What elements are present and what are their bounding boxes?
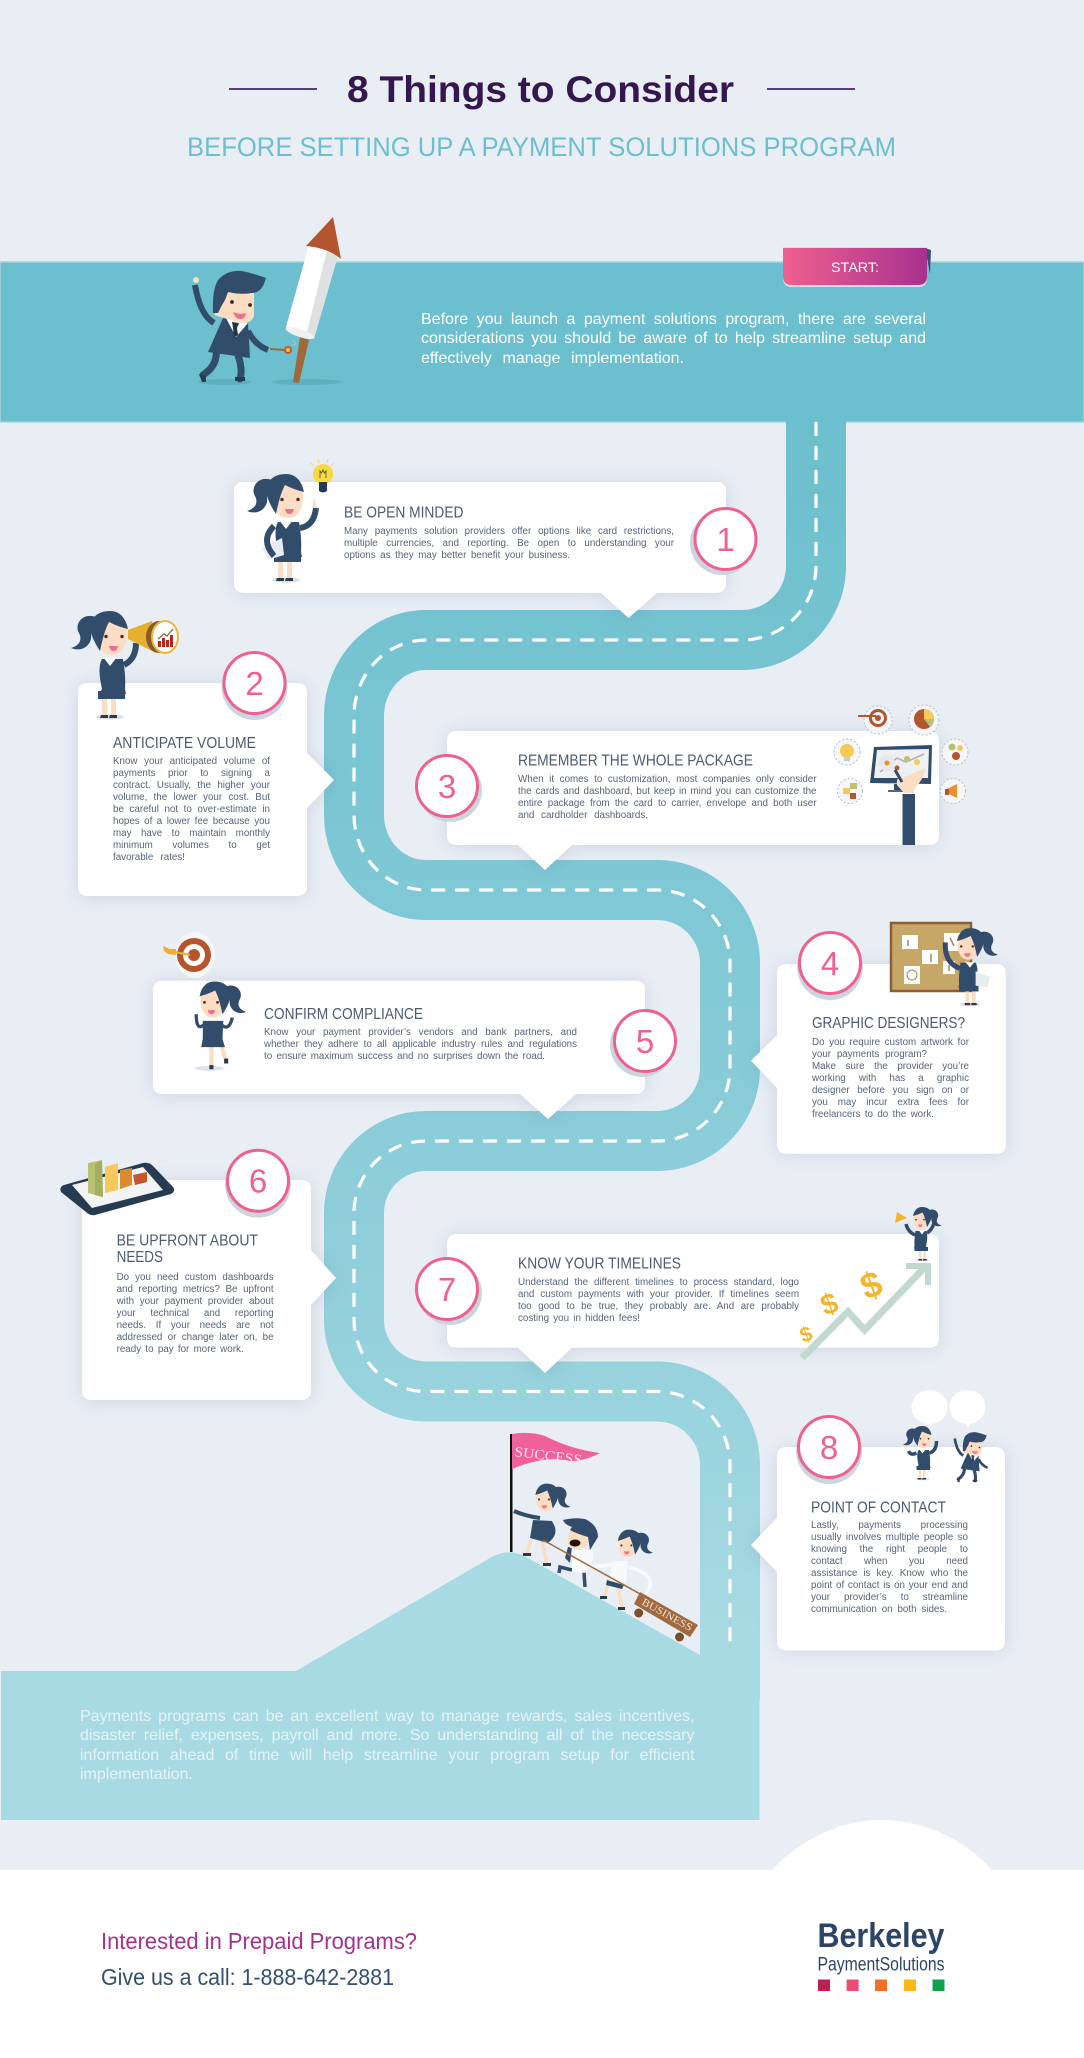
body 3: and cardholder dashboards. [518, 810, 648, 821]
body 5: whether they adhere to all applicable industry rules and regulations [264, 1039, 577, 1050]
body 6: your technical and reporting [117, 1308, 274, 1319]
closing text [80, 1707, 710, 1787]
success flag [510, 1433, 600, 1552]
title: 8 Things to Consider: 8 Things to Consider [347, 69, 734, 110]
body 7 [518, 1277, 809, 1327]
road centre dashes [354, 422, 816, 1643]
illustration: woman with light bulb [247, 459, 334, 582]
heading 3: REMEMBER THE WHOLE PACKAGE [518, 752, 753, 770]
heading 6: BE UPFRONT ABOUT [117, 1232, 258, 1250]
winding road [354, 418, 816, 1700]
body 2: volume, the lower your cost. But [113, 792, 270, 803]
heading 6 [117, 1232, 258, 1266]
closing text: disaster relief, expenses, payroll and more. So understanding all of the necessary [80, 1727, 694, 1744]
badge 2 [222, 652, 288, 720]
body 3: entire package from the card to carrier, envelope and both user [518, 798, 816, 809]
body 5: Know your payment provider’s vendors and bank partners, and [264, 1027, 577, 1038]
body 7: costing you in hidden fees! [518, 1313, 640, 1324]
body 7: Understand the different timelines to process standard, logo [518, 1277, 799, 1288]
body 6: addressed or change later on, be [117, 1332, 274, 1343]
heading 8: POINT OF CONTACT [811, 1500, 946, 1516]
badge 8 [796, 1416, 862, 1484]
body 7: too good to be true, they probably are. And are probably [518, 1301, 799, 1312]
body 2: be careful not to over-estimate in [113, 804, 270, 815]
body 3: When it comes to customization, most companies only consider [518, 774, 816, 785]
body 8: your provider’s to streamline [811, 1592, 968, 1603]
badge 8: 8 [820, 1429, 838, 1466]
body 1: options as they may better benefit your business. [344, 550, 570, 561]
step 1 card: be open minded [234, 459, 756, 618]
body 4: working with has a graphic [812, 1073, 969, 1084]
body 4: Make sure the provider you’re [812, 1061, 969, 1072]
Berkeley Payment Solutions logo [818, 1917, 945, 1991]
body 2: payments prior to signing a [113, 768, 270, 779]
body 4: Do you require custom artwork for [812, 1037, 969, 1048]
start banner band [0, 262, 1084, 422]
badge 5 [610, 1010, 676, 1077]
body 6: ready to pay for more work. [117, 1344, 244, 1355]
step 6 card: be upfront about needs [60, 1150, 336, 1400]
badge 4 [797, 932, 863, 1000]
subtitle: BEFORE SETTING UP A PAYMENT SOLUTIONS PROGRAM [187, 132, 896, 162]
body 4: you may incur extra fees for [812, 1097, 969, 1108]
body 6: Do you need custom dashboards [117, 1272, 274, 1283]
heading 5: CONFIRM COMPLIANCE [264, 1006, 423, 1023]
body 4: your payments program? [812, 1049, 927, 1060]
intro text: considerations you should be aware of to help streamline setup and [421, 330, 926, 347]
step 5 card: confirm compliance [153, 932, 676, 1119]
body 2: hopes of a lower fee because you [113, 816, 270, 827]
body 1: multiple currencies, and reporting. Be open to understanding your [344, 538, 674, 549]
illustration: team pulling business cart up the mountain: BUSINESS [640, 1597, 694, 1634]
illustration: hand, monitor and icons [834, 705, 968, 845]
body 2: favorable rates! [113, 852, 185, 863]
mountain base panel [1, 1552, 760, 1820]
badge 5: 5 [636, 1023, 654, 1060]
intro text: effectively manage implementation. [421, 350, 684, 367]
body 7: and custom payments with your provider. If timelines seem [518, 1289, 799, 1300]
badge 7: 7 [438, 1271, 456, 1308]
body 8: usually involves multiple people so [811, 1532, 968, 1543]
heading 7: KNOW YOUR TIMELINES [518, 1256, 681, 1272]
body 4 [812, 1037, 979, 1123]
step 3 card: remember the whole package [416, 705, 968, 870]
footer panel [0, 1820, 1084, 2058]
body 3: the cards and dashboard, but keep in mind you can customize the [518, 786, 816, 797]
step 4 card: graphic designers [751, 923, 1006, 1154]
start flag: START: [831, 259, 879, 275]
illustration: rising arrow with dollars and woman: $ [855, 1262, 888, 1308]
intro text: Before you launch a payment solutions program, there are several [421, 311, 926, 328]
body 2: may have to maintain monthly [113, 828, 270, 839]
body 4: designer before you sign on or [812, 1085, 969, 1096]
step 8 card: point of contact [751, 1390, 1005, 1650]
body 8: contact when you need [811, 1556, 968, 1567]
body 6: with your payment provider about [117, 1296, 274, 1307]
heading 4: GRAPHIC DESIGNERS? [812, 1015, 965, 1032]
badge 6 [225, 1150, 291, 1218]
badge 3 [416, 756, 482, 822]
body 1 [344, 526, 684, 564]
body 8: assistance is key. Know who the [811, 1568, 968, 1579]
heading 6: NEEDS [117, 1249, 163, 1266]
badge 3: 3 [438, 768, 456, 805]
body 2: minimum volumes to get [113, 840, 270, 851]
illustration: tablet with bar chart [60, 1152, 174, 1215]
badge 6: 6 [249, 1163, 267, 1200]
body 8: point of contact is on your end and [811, 1580, 968, 1591]
illustration: two people with speech bubbles [903, 1390, 988, 1482]
Berkeley Payment Solutions logo: Berkeley [818, 1917, 945, 1955]
step 7 card: know your timelines [416, 1207, 942, 1373]
step 2 card: anticipate volume [71, 611, 334, 896]
illustration: rocket and businessman [193, 217, 342, 385]
Berkeley Payment Solutions logo: PaymentSolutions [818, 1954, 944, 1976]
start flag [783, 247, 931, 287]
body 5: to ensure maximum success and no surprises down the road. [264, 1051, 545, 1062]
badge 2: 2 [245, 665, 264, 702]
illustration: rising arrow with dollars and woman: $ [797, 1322, 816, 1348]
closing text: information ahead of time will help streamline your program setup for efficient [80, 1747, 694, 1764]
heading 2: ANTICIPATE VOLUME [113, 735, 256, 752]
call to action: Give us a call: 1-888-642-2881 [101, 1964, 394, 1990]
body 6: needs. If your needs are not [117, 1320, 274, 1331]
body 6 [117, 1272, 284, 1358]
body 4: freelancers to do the work. [812, 1109, 934, 1120]
body 2: contract. Usually, the higher your [113, 780, 270, 791]
heading 1: BE OPEN MINDED [344, 504, 464, 522]
body 8: communication on both sides. [811, 1604, 947, 1615]
success flag: SUCCESS [514, 1445, 583, 1468]
illustration: rising arrow with dollars and woman: $ [816, 1287, 843, 1323]
illustration: target pin and woman [163, 932, 246, 1071]
body 8 [811, 1520, 978, 1618]
illustration: cork board and woman [891, 923, 998, 1006]
badge 4: 4 [821, 945, 839, 982]
call to action: Interested in Prepaid Programs? [101, 1928, 417, 1954]
body 6: and reporting metrics? Be upfront [117, 1284, 274, 1295]
intro text [421, 310, 941, 372]
badge 1 [690, 508, 756, 575]
call to action [101, 1928, 417, 1990]
body 3 [518, 774, 827, 824]
body 5 [264, 1027, 587, 1065]
body 2 [113, 756, 280, 866]
badge 7 [416, 1258, 482, 1325]
illustration: team pulling business cart up the mountain [510, 1433, 698, 1642]
closing text: implementation. [80, 1766, 193, 1783]
body 8: Lastly, payments processing [811, 1520, 968, 1531]
illustration: woman with telescope [71, 611, 178, 720]
illustration: rising arrow with dollars and woman [797, 1207, 942, 1358]
badge 1: 1 [716, 521, 735, 558]
closing text: Payments programs can be an excellent way to manage rewards, sales incentives, [80, 1708, 694, 1725]
body 8: knowing the right people to [811, 1544, 968, 1555]
body 1: Many payments solution providers offer options like card restrictions, [344, 526, 674, 537]
body 2: Know your anticipated volume of [113, 756, 270, 767]
